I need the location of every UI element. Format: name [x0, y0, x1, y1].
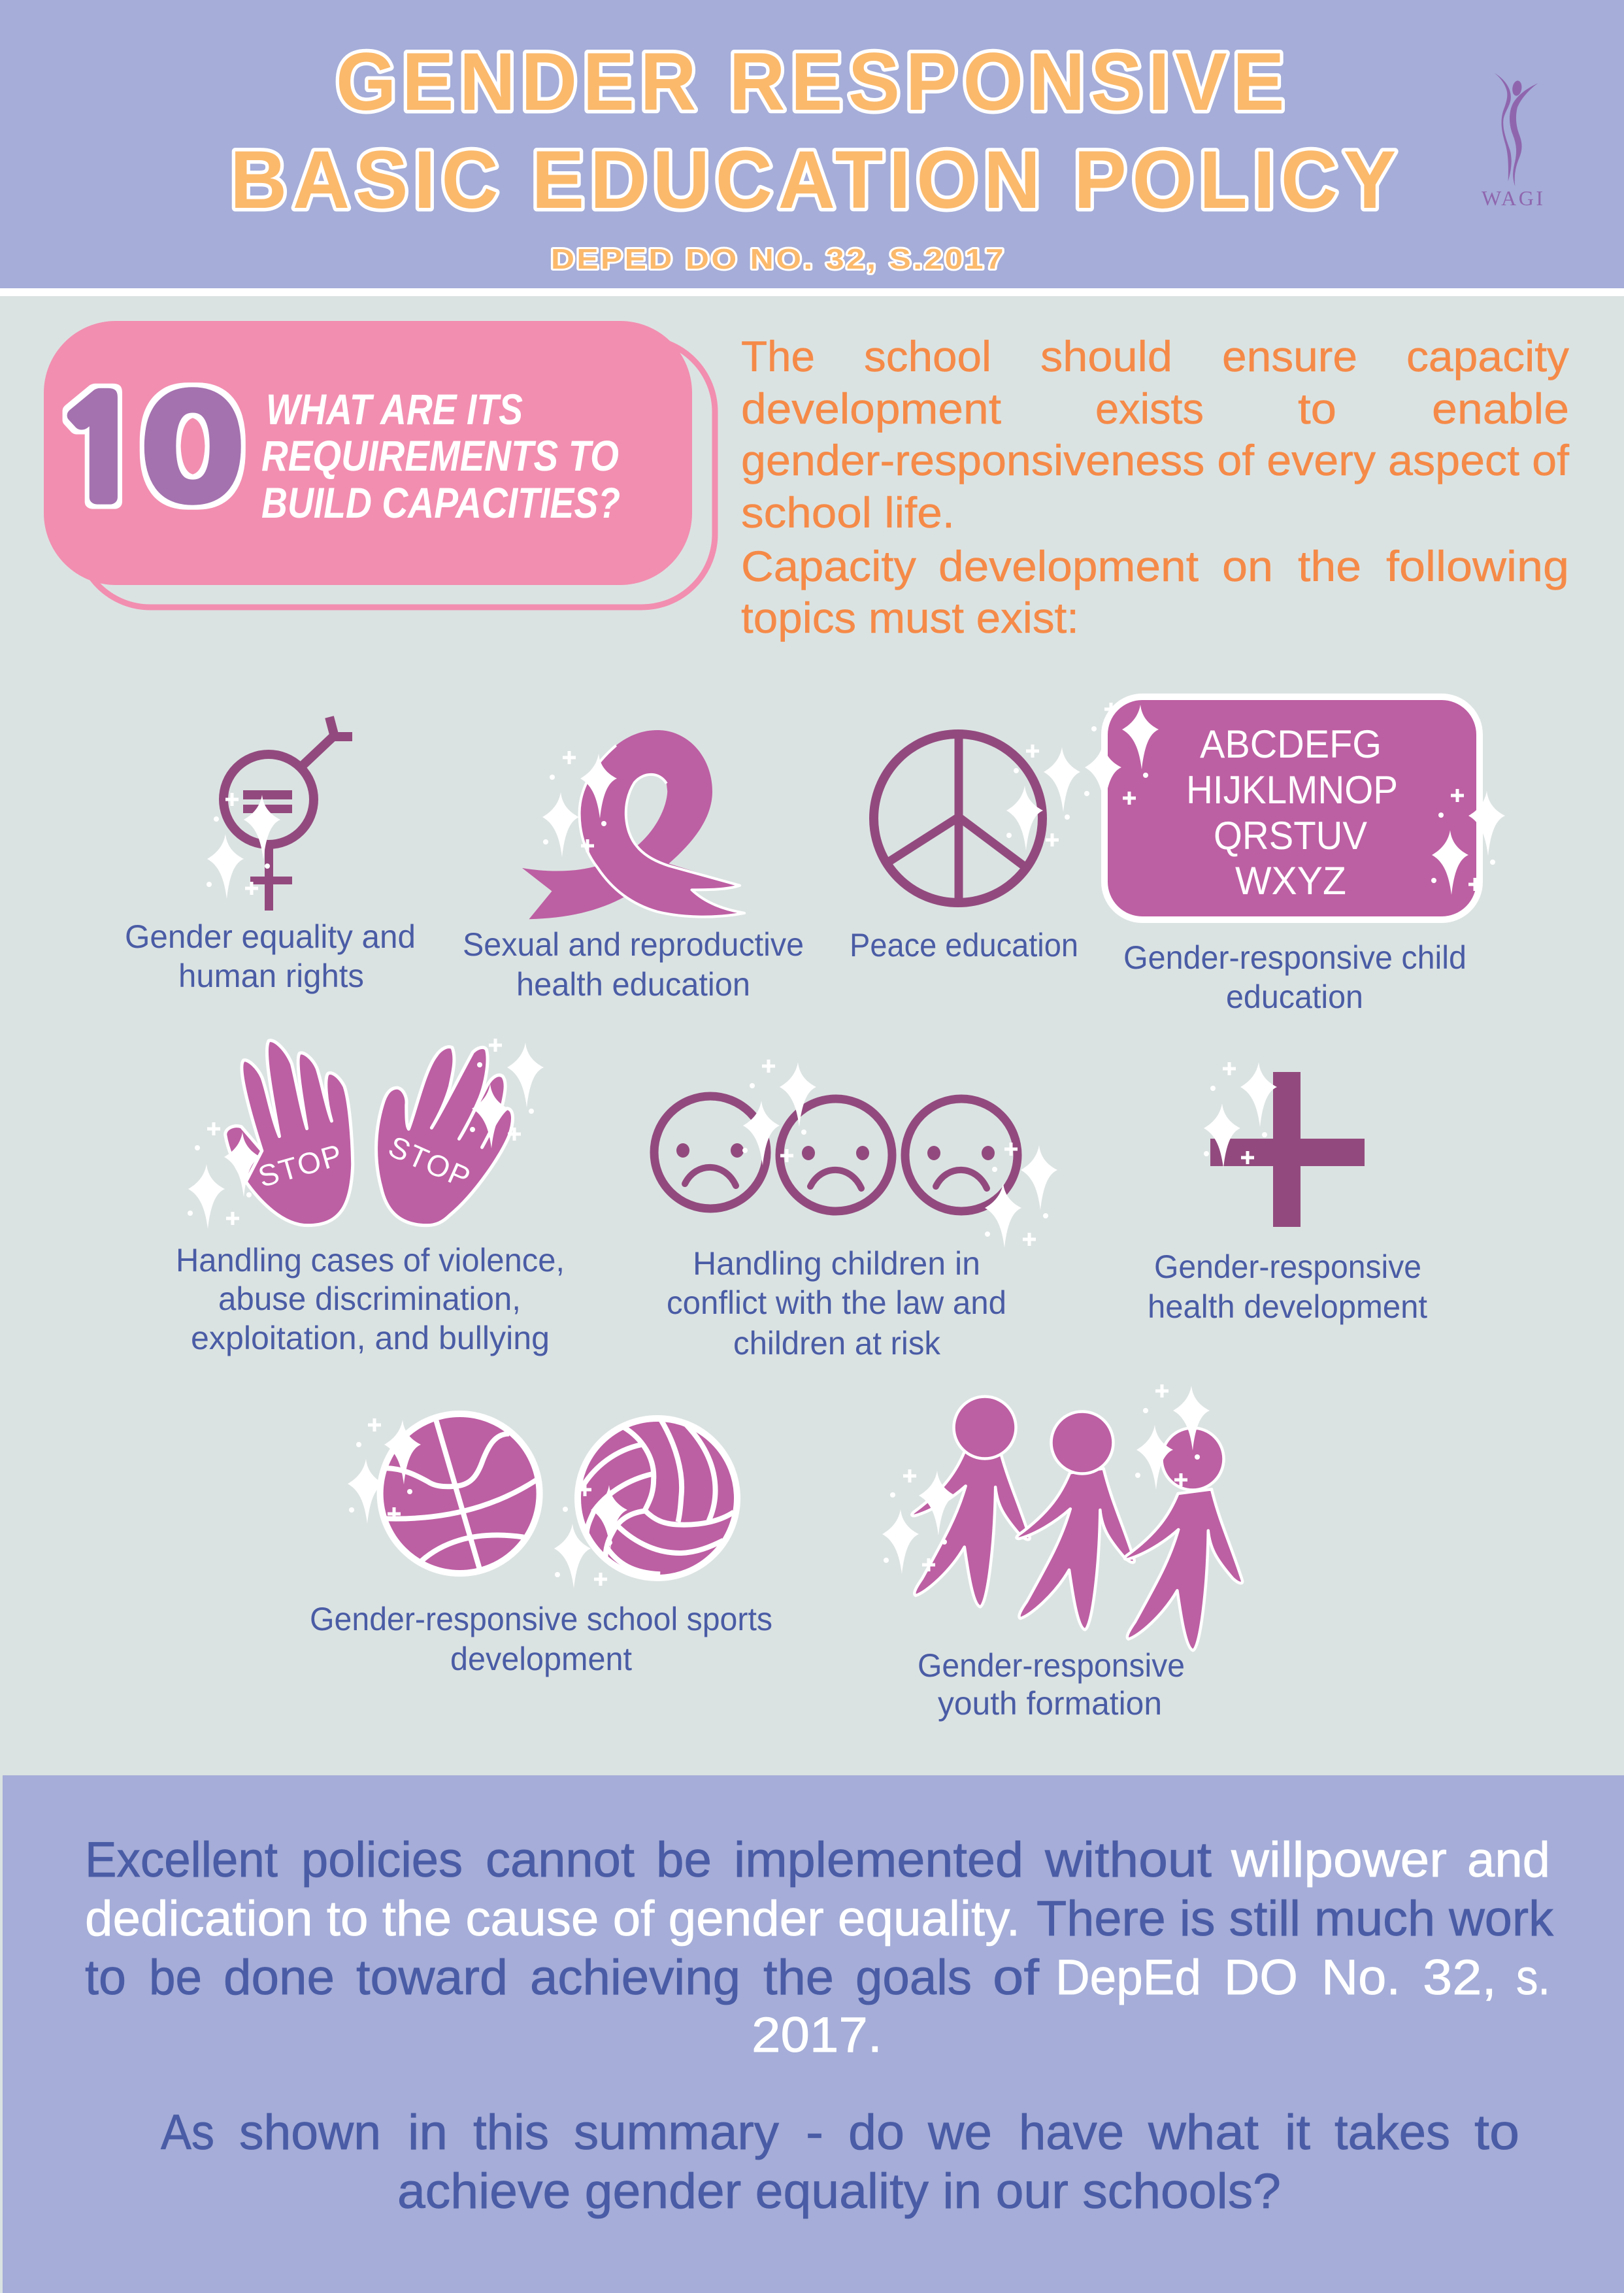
icon: alphabet card — [1084, 697, 1505, 920]
icon: WAGI logo — [1482, 73, 1543, 210]
badge heading — [261, 385, 620, 527]
caption — [310, 1601, 772, 1677]
topic: handling cases of violence — [176, 1039, 565, 1356]
icon: sad faces — [654, 1060, 1057, 1248]
intro paragraph: development — [741, 384, 1001, 433]
caption — [667, 1245, 1006, 1362]
title: BASIC EDUCATION POLICY — [230, 135, 1402, 226]
closing question: achieve gender equality in our schools? — [397, 2164, 1281, 2219]
closing question — [161, 2105, 1519, 2219]
caption — [125, 918, 416, 994]
panel: question badge — [44, 321, 715, 607]
caption: education — [1226, 979, 1363, 1015]
intro paragraph: The — [741, 332, 815, 380]
icon: health cross — [1204, 1062, 1365, 1227]
conclusion paragraph: There is still much work — [1036, 1891, 1554, 1947]
intro paragraph: should — [1040, 332, 1172, 380]
caption — [1123, 939, 1467, 1015]
closing question: takes — [1334, 2105, 1450, 2160]
intro paragraph: school — [864, 332, 991, 380]
badge heading: REQUIREMENTS TO — [261, 431, 619, 480]
conclusion paragraph: to — [85, 1950, 126, 2005]
icon: stop hands: STOP — [384, 1129, 476, 1196]
icon: stop hands — [188, 1039, 544, 1229]
caption — [918, 1647, 1185, 1722]
icon: alphabet card: HIJKLMNOP — [1186, 768, 1398, 812]
caption: Sexual and reproductive — [463, 926, 804, 963]
icon: alphabet card: QRSTUV — [1214, 814, 1367, 858]
icon: three youth figures — [882, 1384, 1242, 1650]
intro paragraph: enable — [1432, 384, 1569, 433]
conclusion paragraph: s. — [1516, 1950, 1550, 2005]
conclusion paragraph: Excellent — [85, 1832, 278, 1888]
closing question: it — [1285, 2105, 1310, 2160]
conclusion paragraph: goals — [855, 1950, 972, 2005]
conclusion paragraph: 2017. — [752, 2007, 882, 2063]
conclusion paragraph: be — [149, 1950, 202, 2005]
closing question: As — [161, 2105, 214, 2160]
caption: youth formation — [938, 1685, 1162, 1722]
closing question: we — [927, 2105, 992, 2160]
intro paragraph — [741, 332, 1570, 642]
caption: health development — [1148, 1288, 1427, 1325]
closing question: shown — [239, 2105, 381, 2160]
number 10: 0 — [141, 382, 243, 520]
conclusion paragraph: willpower — [1231, 1832, 1447, 1888]
topic: gender equality and human rights — [125, 717, 416, 994]
intro paragraph: topics must exist: — [741, 594, 1079, 642]
intro paragraph: on — [1222, 542, 1273, 590]
title — [230, 37, 1402, 226]
caption: children at risk — [733, 1325, 941, 1362]
topic: gender-responsive child education — [1084, 697, 1505, 1015]
number 10: 1 — [53, 382, 147, 520]
conclusion paragraph: be — [656, 1832, 712, 1888]
caption — [176, 1242, 565, 1356]
topic: peace education — [850, 734, 1080, 963]
closing question: have — [1019, 2105, 1124, 2160]
caption: Handling children in — [693, 1245, 980, 1282]
conclusion paragraph: of — [993, 1950, 1040, 2005]
caption: health education — [516, 966, 750, 1003]
caption: development — [450, 1641, 632, 1677]
intro paragraph: the — [1298, 542, 1361, 590]
closing question: summary — [574, 2105, 779, 2160]
conclusion paragraph: dedication to the cause of gender equality. — [85, 1891, 1020, 1947]
caption: Gender-responsive child — [1123, 939, 1467, 976]
conclusion paragraph — [85, 1832, 1554, 2063]
closing question: - — [806, 2105, 823, 2160]
intro paragraph: to — [1298, 384, 1336, 433]
topic: gender-responsive youth formation — [882, 1384, 1242, 1722]
title: GENDER RESPONSIVE — [336, 37, 1290, 127]
topic: gender-responsive health development — [1148, 1062, 1427, 1325]
caption: Gender-responsive — [1154, 1248, 1421, 1285]
intro paragraph: following — [1386, 542, 1569, 590]
badge heading: WHAT ARE ITS — [266, 385, 523, 433]
closing question: do — [848, 2105, 904, 2160]
intro paragraph: gender-responsiveness of every aspect of — [741, 436, 1570, 484]
conclusion paragraph: DepEd — [1055, 1950, 1201, 2005]
conclusion paragraph: done — [224, 1950, 335, 2005]
intro paragraph: ensure — [1222, 332, 1357, 380]
panel: header — [0, 0, 1624, 296]
topic: gender-responsive school sports development — [310, 1414, 772, 1677]
closing question: what — [1148, 2105, 1259, 2160]
icon: gender symbol — [207, 717, 352, 911]
icon: stop hands: STOP — [254, 1137, 347, 1194]
caption: Peace education — [850, 927, 1078, 963]
icon: basketball and volleyball — [348, 1414, 737, 1588]
caption: Gender equality and — [125, 918, 416, 955]
badge heading: BUILD CAPACITIES? — [261, 478, 620, 527]
intro paragraph: school life. — [741, 488, 955, 537]
icon: alphabet card: WXYZ — [1235, 859, 1346, 903]
caption: human rights — [178, 958, 364, 994]
conclusion paragraph: implemented — [734, 1832, 1023, 1888]
caption: conflict with the law and — [667, 1284, 1006, 1321]
topic: sexual and reproductive health education — [463, 730, 804, 1003]
caption: Gender-responsive — [918, 1647, 1185, 1684]
conclusion paragraph: achieving — [530, 1950, 740, 2005]
intro paragraph: Capacity — [741, 542, 916, 590]
icon: WAGI logo: WAGI — [1482, 186, 1543, 210]
conclusion paragraph: 32, — [1423, 1950, 1497, 2005]
caption: Gender-responsive school sports — [310, 1601, 772, 1637]
closing question: to — [1474, 2105, 1519, 2160]
intro paragraph: capacity — [1406, 332, 1569, 380]
conclusion paragraph: cannot — [486, 1832, 635, 1888]
caption: abuse discrimination, — [218, 1280, 521, 1317]
intro paragraph: exists — [1095, 384, 1204, 433]
conclusion paragraph: and — [1467, 1832, 1550, 1888]
conclusion paragraph: DO — [1224, 1950, 1298, 2005]
subtitle: DEPED DO NO. 32, S.2017 — [551, 243, 1006, 275]
conclusion paragraph: the — [763, 1950, 834, 2005]
conclusion paragraph: No. — [1321, 1950, 1400, 2005]
icon: peace sign — [874, 734, 1080, 903]
topic: handling children in conflict with the law — [654, 1060, 1057, 1362]
caption: Handling cases of violence, — [176, 1242, 565, 1279]
caption — [463, 926, 804, 1003]
panel: conclusion — [3, 1775, 1624, 2293]
caption — [1148, 1248, 1427, 1325]
intro paragraph: development — [938, 542, 1199, 590]
caption: exploitation, and bullying — [191, 1320, 550, 1356]
conclusion paragraph: without — [1044, 1832, 1212, 1888]
icon: alphabet card: ABCDEFG — [1200, 722, 1382, 766]
closing question: in — [408, 2105, 448, 2160]
closing question: this — [473, 2105, 549, 2160]
icon: ribbon — [522, 730, 744, 919]
conclusion paragraph: policies — [301, 1832, 463, 1888]
conclusion paragraph: toward — [356, 1950, 508, 2005]
